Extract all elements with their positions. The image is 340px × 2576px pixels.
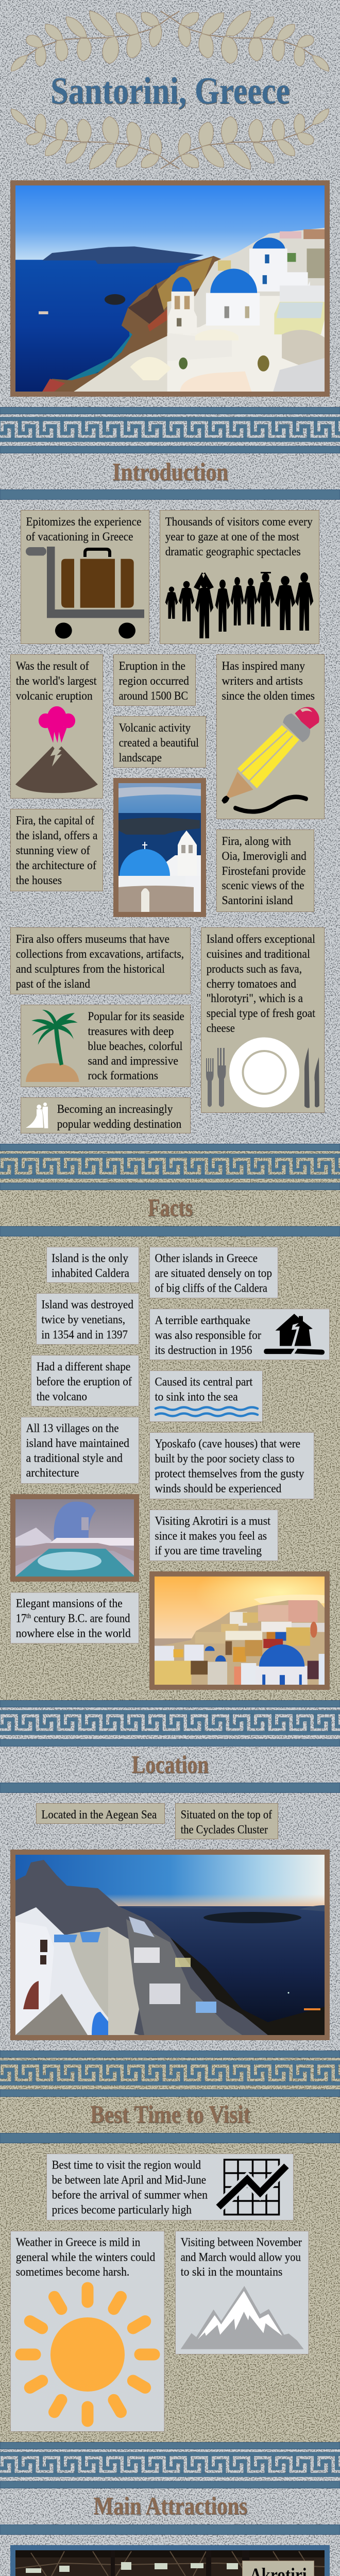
panel: weather: Weather in Greece is mild in: [16, 2235, 141, 2248]
panel: weather: sometimes become harsh.: [16, 2265, 129, 2278]
panel: cuisine: cherry tomatoes and: [207, 977, 296, 990]
panel: epitomizes: Epitomizes the experience: [26, 515, 141, 528]
icon: rising chart: [218, 2160, 286, 2214]
panel: 13 villages: All 13 villages on the: [26, 1422, 119, 1434]
panel: seaside treasures: treasures with deep: [88, 1025, 174, 1038]
photo: Akrotiri excavation: [10, 2545, 330, 2576]
panel: yposkafo: winds should be experienced: [155, 1482, 282, 1495]
panel: scenic views: Fira, along with: [222, 835, 291, 848]
panel: seaside treasures: rock formations: [88, 1069, 158, 1082]
panel: cuisine: [201, 927, 325, 1113]
photo: Santorini blue domes: [10, 180, 330, 397]
panel: central part sink: [149, 1370, 263, 1422]
panel: cuisine: "hlorotyri", which is a: [207, 992, 303, 1005]
panel: inspired writers: since the olden times: [222, 689, 315, 702]
panel: seaside treasures: Popular for its seaside: [88, 1010, 184, 1023]
panel: destroyed by venetians: twice by venetians,: [41, 1313, 125, 1326]
panel: inspired writers: [216, 654, 325, 819]
panel: volcanic activity: created a beautiful: [119, 736, 199, 749]
panel: volcanic eruption: Was the result of: [16, 659, 89, 672]
icon: waves: [156, 1408, 258, 1416]
heading: Main Attractions: Main Attractions: [93, 2492, 247, 2520]
photo: Santorini sunset: [149, 1571, 330, 1690]
panel: only inhabited caldera: inhabited Caldera: [52, 1267, 129, 1280]
panel: ski season: and March would allow you: [181, 2250, 301, 2263]
divider: greek key: [0, 2442, 340, 2488]
divider: greek key: [0, 1144, 340, 1190]
panel: thousands of visitors: dramatic geographic spectacles: [165, 545, 301, 558]
panel: 13 villages: architecture: [26, 1466, 79, 1479]
panel: yposkafo: protect themselves from the gusty: [155, 1467, 304, 1480]
panel: Fira capital: the houses: [16, 874, 62, 887]
panel: cuisine: special type of fresh goat: [207, 1007, 316, 1020]
icon: bride and groom: [26, 1103, 48, 1128]
wreath: top laurel: [11, 11, 329, 71]
panel: scenic views: Oia, Imerovigli and: [222, 850, 307, 862]
panel: inspired writers: Has inspired many: [222, 659, 305, 672]
panel: different shape: [31, 1355, 139, 1406]
panel: epitomizes: of vacationing in Greece: [26, 530, 133, 543]
panel: ski season: [175, 2231, 309, 2354]
panel: best time: before the arrival of summer when: [52, 2188, 208, 2201]
panel: only inhabited caldera: Island is the only: [52, 1252, 128, 1264]
panel: yposkafo: built by the poor society class to: [155, 1452, 295, 1465]
panel: volcanic activity: Volcanic activity: [119, 721, 191, 734]
icon: tourists silhouettes: [165, 572, 313, 638]
panel: best time: prices become particularly high: [52, 2203, 192, 2216]
panel: only inhabited caldera: [46, 1247, 139, 1283]
panel: visiting akrotiri: Visiting Akrotiri is a must: [155, 1514, 271, 1527]
panel: wedding destination: [21, 1097, 191, 1133]
panel: volcanic eruption: [10, 654, 103, 799]
panel: best time: [46, 2154, 294, 2221]
panel: eruption date: around 1500 BC: [119, 689, 188, 702]
panel: other islands: of big cliffs of the Caldera: [155, 1282, 267, 1295]
panel: yposkafo: Yposkafo (cave houses) that were: [155, 1437, 300, 1450]
panel: museums: past of the island: [16, 977, 90, 990]
panel: elegant mansions: Elegant mansions of the: [16, 1597, 123, 1610]
icon: luggage cart: [26, 547, 144, 639]
panel: visiting akrotiri: since it makes you feel as: [155, 1529, 267, 1542]
panel: eruption date: region occurred: [119, 674, 189, 687]
panel: scenic views: scenic views of the: [222, 879, 304, 892]
heading bar: [0, 1226, 340, 1236]
panel: elegant mansions: nowhere else in the world: [16, 1627, 131, 1640]
panel: best time: be between late April and Mid-June: [52, 2173, 206, 2186]
icon: volcano: [15, 706, 98, 793]
icon: snowy mountain: [181, 2286, 304, 2349]
heading bar: [0, 489, 340, 500]
panel: aegean sea: [36, 1803, 165, 1824]
panel: volcanic eruption: the world's largest: [16, 674, 97, 687]
panel: different shape: Had a different shape: [37, 1360, 130, 1373]
panel: different shape: the volcano: [37, 1390, 87, 1403]
panel: seaside treasures: [21, 1005, 191, 1087]
panel: inspired writers: writers and artists: [222, 674, 303, 687]
panel: visiting akrotiri: [149, 1510, 278, 1561]
icon: cracked house: [264, 1314, 325, 1354]
panel: aegean sea: Located in the Aegean Sea: [41, 1808, 157, 1821]
heading: Best Time to Visit: Best Time to Visit: [90, 2100, 251, 2128]
panel: scenic views: Santorini island: [222, 894, 293, 907]
panel: scenic views: Firostefani provide: [222, 865, 305, 877]
panel: Fira capital: the island, offers a: [16, 829, 97, 842]
panel: cyclades cluster: the Cyclades Cluster: [181, 1823, 268, 1836]
panel: cyclades cluster: Situated on the top of: [181, 1808, 272, 1821]
panel: central part sink: to sink into the sea: [155, 1391, 238, 1403]
panel: museums: collections from excavations, artifacts,: [16, 947, 184, 960]
panel: weather: [0, 2231, 178, 2445]
panel: 13 villages: island have maintained: [26, 1436, 129, 1450]
panel: elegant mansions: [10, 1592, 139, 1643]
heading: Location: Location: [132, 1750, 209, 1778]
panel: destroyed by venetians: in 1354 and in 1397: [41, 1328, 128, 1341]
panel: destroyed by venetians: Island was destroyed: [41, 1298, 133, 1311]
panel: seaside treasures: sand and impressive: [88, 1055, 178, 1067]
panel: earthquake: A terrible earthquake: [155, 1314, 250, 1327]
panel: cuisine: cheese: [207, 1022, 235, 1035]
label: Akrotiri: [242, 2561, 314, 2576]
panel: eruption date: [113, 654, 196, 706]
panel: Fira capital: stunning view of: [16, 844, 90, 857]
icon: palm tree on island: [26, 1010, 79, 1082]
panel: elegant mansions: 17: [16, 1612, 28, 1625]
panel: earthquake: its destruction in 1956: [155, 1344, 252, 1357]
panel: ski season: Visiting between November: [181, 2235, 302, 2248]
panel: other islands: are situated densely on top: [155, 1267, 272, 1280]
panel: volcanic activity: [113, 716, 206, 768]
panel: thousands of visitors: year to gaze at one of the most: [165, 530, 299, 543]
panel: thousands of visitors: Thousands of visitors come every: [165, 515, 313, 528]
photo: Fira church: [113, 778, 206, 917]
heading bar: [0, 1783, 340, 1793]
divider: greek key: [0, 407, 340, 453]
panel: Fira capital: Fira, the capital of: [16, 814, 94, 827]
panel: other islands: Other islands in Greece: [155, 1252, 258, 1264]
panel: thousands of visitors: [160, 510, 319, 644]
panel: elegant mansions: century B.C. are found: [31, 1612, 130, 1625]
panel: weather: general while the winters could: [16, 2250, 156, 2263]
divider: greek key: [0, 2050, 340, 2097]
panel: 13 villages: a traditional style and: [26, 1452, 123, 1464]
panel: earthquake: [149, 1309, 330, 1360]
panel: Fira capital: the architecture of: [16, 859, 96, 872]
panel: 13 villages: [21, 1417, 139, 1484]
panel: best time: Best time to visit the region would: [52, 2158, 201, 2171]
panel: ski season: to ski in the mountains: [181, 2265, 282, 2278]
divider: greek key: [0, 1700, 340, 1747]
panel: eruption date: Eruption in the: [119, 659, 185, 672]
panel: museums: [10, 927, 191, 994]
panel: volcanic eruption: volcanic eruption: [16, 689, 93, 702]
panel: cuisine: products such as fava,: [207, 962, 302, 975]
panel: scenic views: [216, 829, 314, 912]
panel: elegant mansions: th: [26, 1612, 31, 1620]
panel: wedding destination: popular wedding destination: [57, 1117, 182, 1130]
title: Santorini, Greece: [50, 70, 290, 112]
panel: destroyed by venetians: [36, 1293, 139, 1345]
panel: cuisine: Island offers exceptional: [207, 933, 315, 945]
heading: Facts: Facts: [148, 1193, 193, 1222]
panel: different shape: before the eruption of: [37, 1375, 132, 1388]
heading: Introduction: Introduction: [112, 457, 228, 486]
panel: museums: Fira also offers museums that have: [16, 933, 169, 945]
photo: Fira at dusk: [10, 1850, 330, 2040]
panel: central part sink: Caused its central part: [155, 1376, 253, 1388]
panel: yposkafo: [149, 1432, 314, 1499]
photo: cave pool: [10, 1494, 139, 1582]
panel: epitomizes: [21, 510, 149, 644]
panel: visiting akrotiri: if you are time traveling: [155, 1544, 262, 1557]
panel: cuisine: cuisines and traditional: [207, 947, 310, 960]
icon: plate and cutlery: [206, 1038, 319, 1108]
panel: Fira capital: [10, 809, 103, 891]
panel: wedding destination: Becoming an increasingly: [57, 1103, 173, 1115]
panel: volcanic activity: landscape: [119, 751, 162, 764]
panel: museums: and sculptures from the historical: [16, 962, 165, 975]
heading bar: [0, 2133, 340, 2143]
icon: pencil: [222, 707, 319, 811]
icon: sun: [0, 2264, 178, 2445]
panel: seaside treasures: blue beaches, colorful: [88, 1040, 182, 1053]
panel: earthquake: was also responsible for: [155, 1329, 261, 1342]
panel: other islands: [149, 1247, 278, 1298]
panel: cyclades cluster: [175, 1803, 278, 1839]
heading bar: [0, 2524, 340, 2535]
wreath: bottom laurel: [11, 109, 329, 170]
